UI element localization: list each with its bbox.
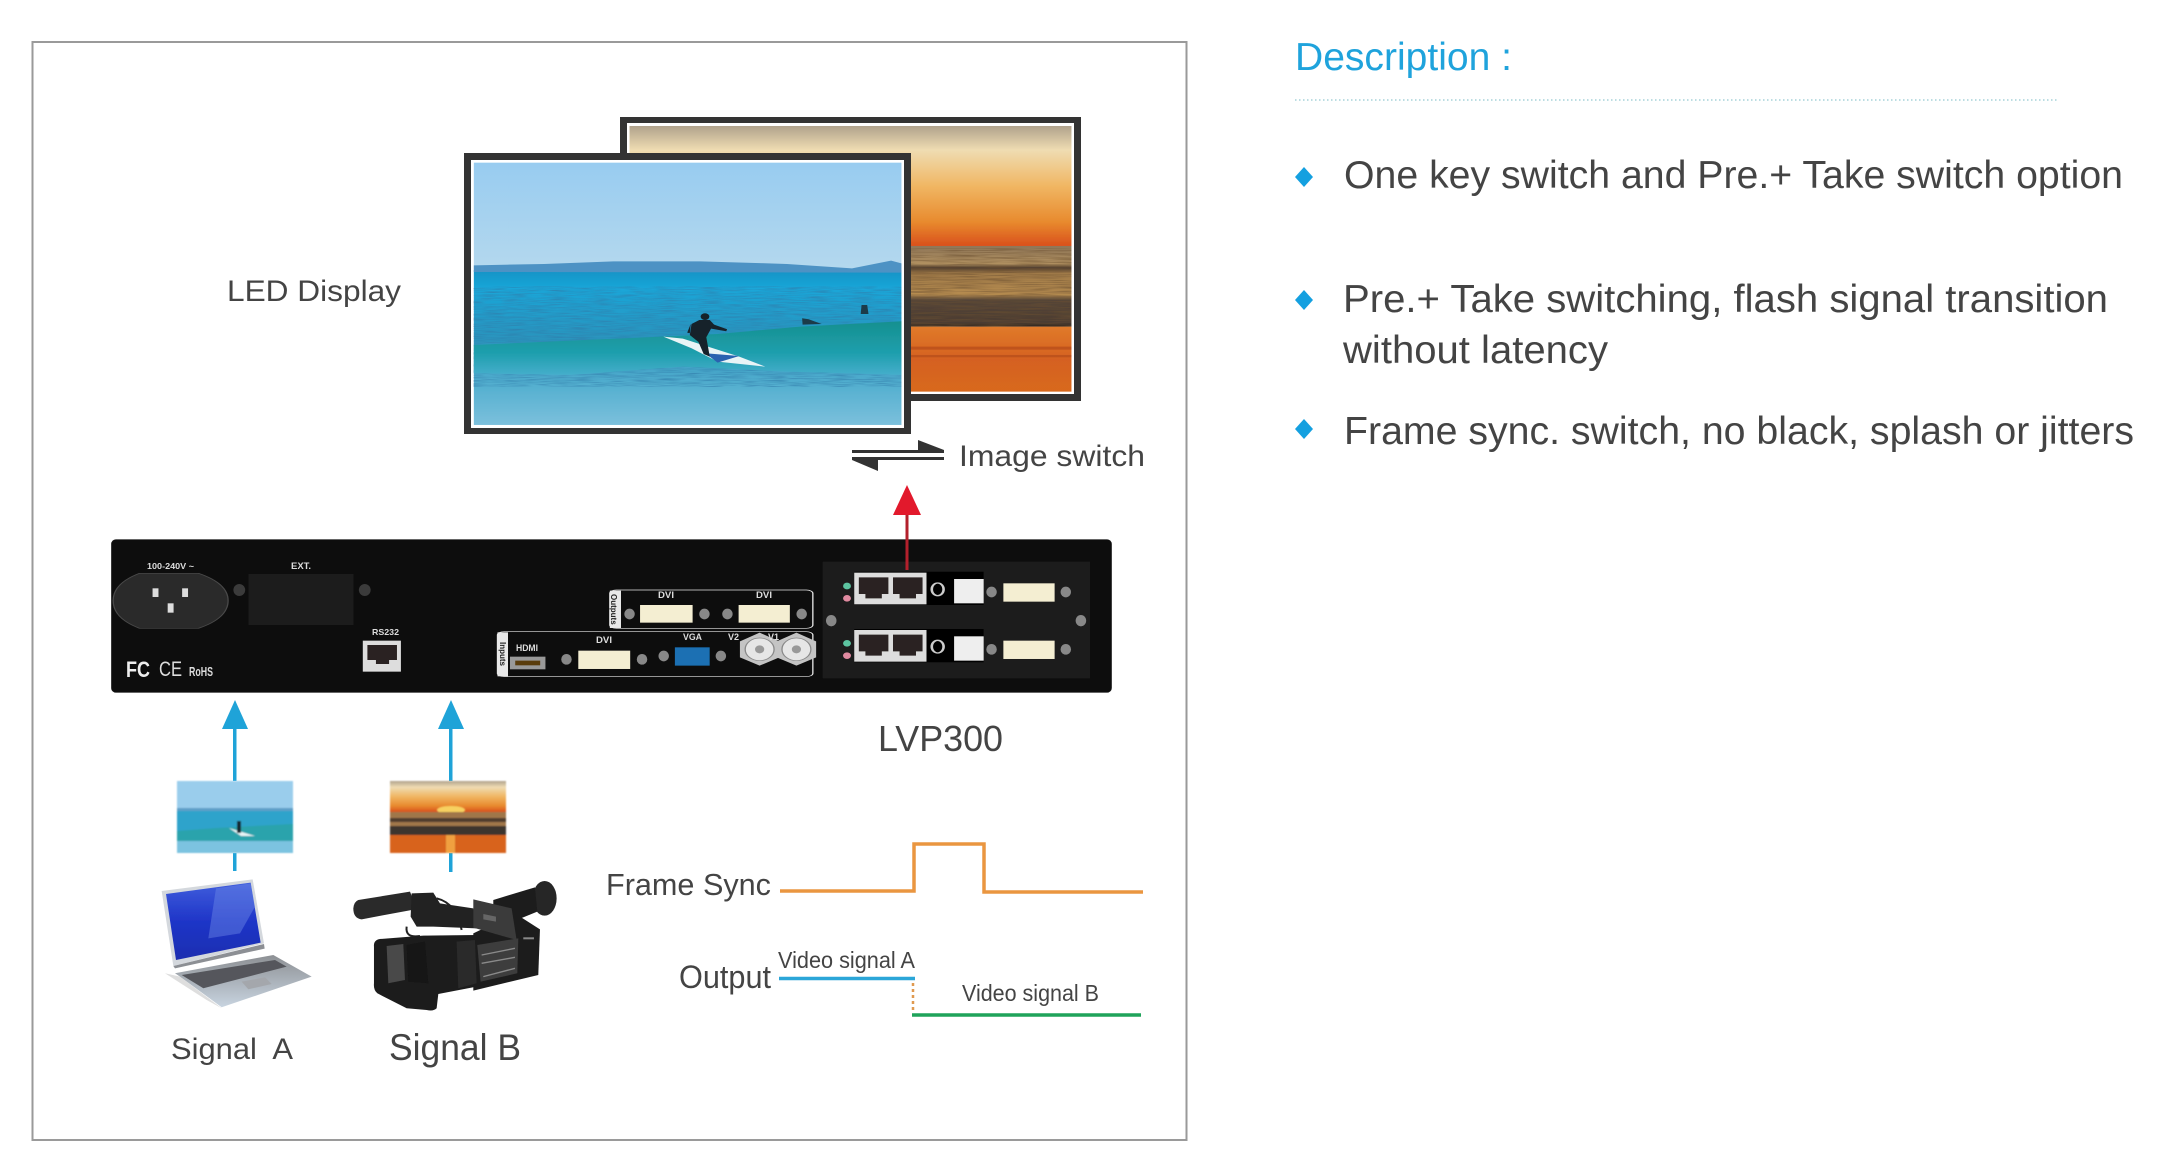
panel labels: DVI <box>756 590 772 600</box>
outputs group <box>610 590 813 628</box>
panel labels: RS232 <box>372 627 399 637</box>
panel labels: V2 <box>728 632 739 642</box>
panel labels: FC <box>126 657 150 682</box>
bullet 1: One key switch and Pre.+ Take switch option <box>1344 154 2123 197</box>
heading: Description: Description : <box>1295 36 1512 79</box>
icon: image switch arrows <box>852 440 944 471</box>
panel labels: Inputs <box>498 642 507 667</box>
panel labels: 100-240V ~ <box>147 561 194 571</box>
bullet 3: Frame sync. switch, no black, splash or jitters <box>1344 410 2134 453</box>
divider: dotted rule <box>1295 99 2059 101</box>
label: LVP300: LVP300 <box>878 718 1003 759</box>
panel labels: HDMI <box>516 643 538 653</box>
panel labels: EXT. <box>291 561 311 571</box>
arrow: signal B input <box>438 700 464 872</box>
label: Output: Output <box>679 959 771 995</box>
inputs group <box>497 632 816 677</box>
power socket <box>113 573 228 628</box>
panel labels <box>126 561 779 682</box>
output card module <box>823 562 1090 678</box>
arrow: red output arrow <box>893 485 921 570</box>
icon: laptop <box>162 879 312 1008</box>
panel labels: VGA <box>683 632 702 642</box>
thumbnail: surfer <box>177 781 293 853</box>
EXT slot <box>248 574 354 625</box>
label: Signal A: Signal A <box>171 1033 293 1066</box>
label: Frame Sync: Frame Sync <box>606 867 771 902</box>
label: Signal B: Signal B <box>389 1027 521 1068</box>
device: LVP300 rear panel <box>111 539 1112 693</box>
label: Video signal A: Video signal A <box>778 947 916 973</box>
bullet 2 <box>1295 278 2108 372</box>
chart: transition dotted line <box>912 983 914 1013</box>
label: Image switch: Image switch <box>959 440 1145 473</box>
panel: diagram frame <box>32 42 1186 1140</box>
panel labels: Outputs <box>609 594 618 625</box>
RS232 jack <box>363 641 401 672</box>
thumbnail: sunset <box>390 781 506 853</box>
label: LED Display: LED Display <box>227 275 401 308</box>
panel labels: DVI <box>596 635 612 645</box>
panel labels: CE <box>159 658 182 681</box>
back screen: sunset image <box>620 117 1081 401</box>
chart: video signal A line <box>779 977 915 980</box>
front screen: surfer image <box>464 153 911 434</box>
chart: video signal B line <box>912 1013 1141 1017</box>
panel labels: V1 <box>768 632 779 642</box>
arrow: signal A input <box>222 700 248 871</box>
bullet 2: Pre.+ Take switching, flash signal transition <box>1343 278 2108 321</box>
panel labels: DVI <box>658 590 674 600</box>
bullet 2: without latency <box>1342 329 1609 372</box>
label: Video signal B: Video signal B <box>962 980 1099 1006</box>
chart: frame sync pulse <box>780 844 1143 892</box>
icon: video camera <box>353 881 557 1011</box>
panel labels: RoHS <box>189 664 213 679</box>
